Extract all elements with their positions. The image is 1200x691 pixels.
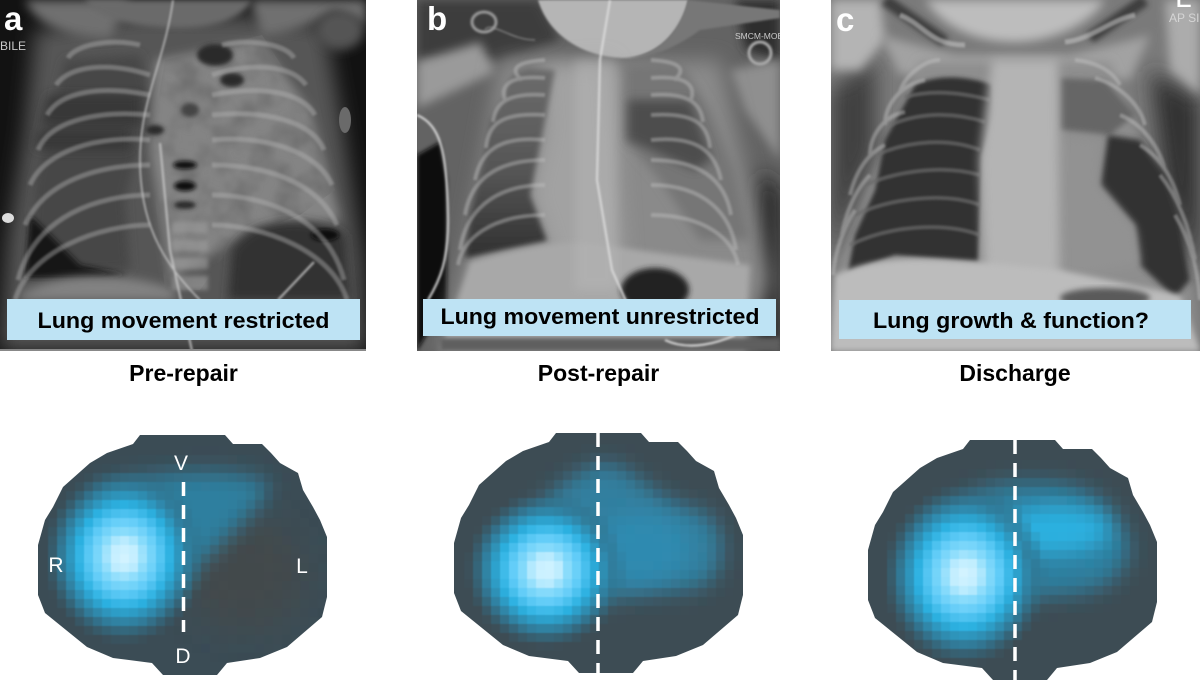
caption: pre-repair: Pre-repair (129, 360, 238, 386)
label: lung growth and function (839, 300, 1191, 339)
label: lung movement restricted (7, 299, 360, 340)
right lung dark fields (30, 55, 150, 275)
label: lung growth and function: Lung growth & function? (873, 308, 1149, 333)
letter c: c (836, 1, 854, 38)
right lung wedge (465, 68, 555, 258)
panel b: post-repair x-ray (417, 0, 786, 351)
tubes and wires (417, 0, 735, 346)
upper chest (880, 35, 1150, 80)
V, D, R, L labels (48, 452, 308, 668)
midline dashes (1013, 440, 1017, 680)
head (538, 0, 688, 58)
left lung upper (1060, 78, 1135, 135)
tubes (140, 0, 314, 351)
label: lung movement restricted: Lung movement restricted (38, 308, 330, 333)
AP tag: AP SI (1169, 11, 1199, 25)
EIT image c (860, 433, 1170, 689)
clavicles (900, 15, 1135, 45)
caption: post-repair: Post-repair (538, 360, 659, 386)
chest wall (831, 62, 1200, 351)
left lower dark bowel (228, 221, 350, 300)
shoulders (417, 42, 495, 108)
midline dashes (182, 482, 185, 632)
V, D, R, L labels: R (48, 554, 64, 577)
spine (172, 222, 208, 290)
thorax soft tissue (0, 15, 366, 351)
abdomen (831, 259, 1200, 351)
spine (576, 58, 618, 248)
label: lung movement unrestricted (423, 299, 776, 336)
abdomen (440, 243, 750, 351)
label: lung movement unrestricted: Lung movement unrestricted (440, 304, 760, 329)
panel a: pre-repair x-ray (0, 0, 366, 351)
panel c: discharge x-ray (831, 0, 1200, 351)
letter a: a (4, 0, 23, 37)
V, D, R, L labels: D (175, 645, 191, 668)
gastric bubble (621, 268, 689, 312)
heart (1096, 160, 1146, 266)
central haze (532, 53, 625, 246)
V, D, R, L labels: V (174, 452, 188, 475)
EIT image b (446, 426, 756, 682)
letter b: b (427, 0, 447, 37)
mediastinum (980, 60, 1060, 285)
rib outlines (833, 60, 1200, 300)
ribs (15, 42, 347, 300)
left lung (625, 62, 750, 240)
BILE tag: BILE (0, 39, 26, 53)
liver shadow (20, 276, 175, 300)
caption: discharge: Discharge (959, 360, 1071, 386)
bowel loops mottled field (150, 40, 340, 280)
ribs (458, 60, 738, 265)
SMCM tag: SMCM-MOBI (735, 31, 786, 41)
neck and chin (925, 0, 1105, 42)
midline dashes (596, 433, 600, 675)
right lung (848, 77, 995, 272)
V, D, R, L labels: L (296, 555, 308, 578)
left lung lower (1100, 135, 1190, 298)
EIT image a (30, 428, 340, 684)
ECG lead (339, 107, 351, 133)
thorax (440, 60, 770, 351)
